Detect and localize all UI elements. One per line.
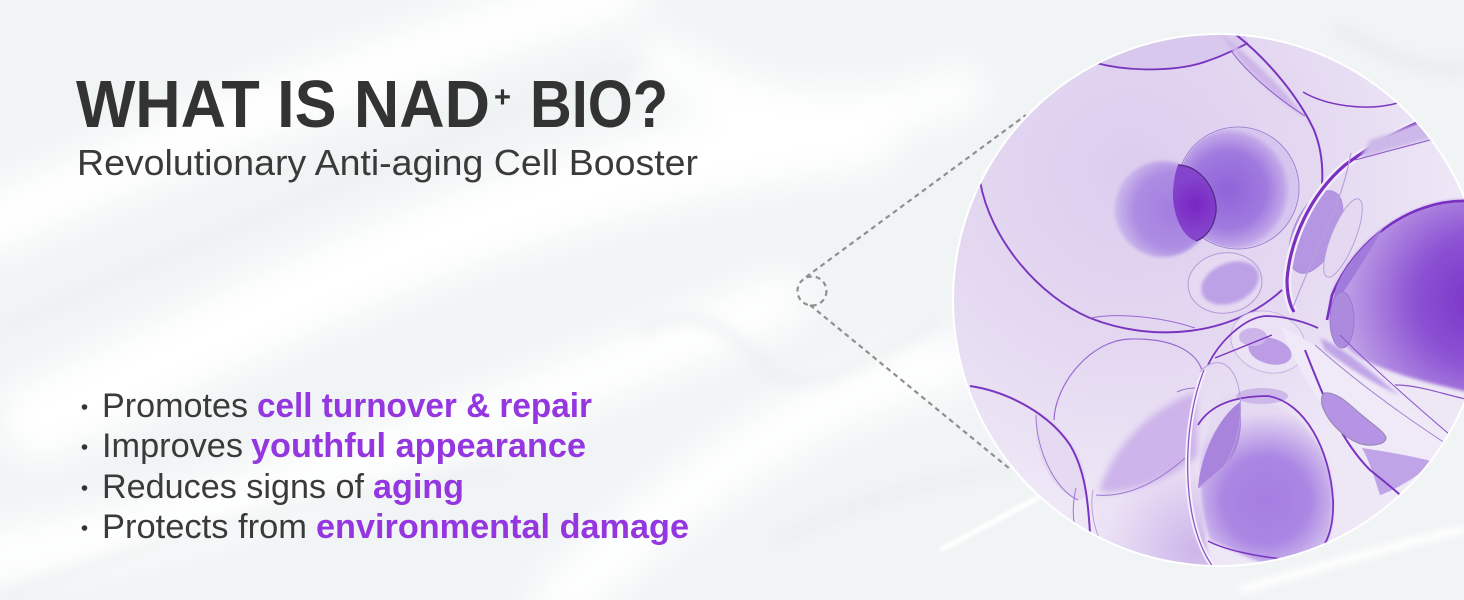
top lenses [1098, 35, 1398, 184]
bullet: cell turnover: cell turnover & repair [257, 387, 592, 425]
bullet: environmental damage: environmental damage [316, 508, 689, 546]
circle frame [952, 33, 1464, 567]
magnifier callout: dashed circle and lines [798, 115, 1026, 469]
bullet: cell turnover [82, 387, 592, 425]
large arc left [980, 181, 1282, 332]
bullet: signs of aging: aging [373, 468, 464, 506]
bullet: youthful appearance [82, 427, 586, 465]
lower oval cell [1188, 363, 1333, 568]
bullet: youthful appearance: youthful appearance [251, 427, 586, 465]
subtitle: Revolutionary Anti-aging Cell Booster [77, 142, 698, 183]
bullet: environmental damage [82, 508, 689, 546]
small cell [1188, 252, 1262, 314]
bullet: signs of aging [82, 468, 464, 506]
title: BIO? [530, 67, 668, 142]
magnified cell illustration [950, 20, 1464, 570]
bullet: signs of aging: Reduces signs of [102, 468, 365, 506]
benefits list [82, 387, 689, 546]
title: WHAT IS NAD [76, 67, 490, 142]
ring cell, right [1278, 123, 1433, 312]
center junction lenses [1207, 310, 1318, 374]
lower left arc [970, 386, 1100, 540]
big sphere, right [1327, 200, 1464, 395]
lens base [950, 30, 1464, 570]
pale round cell, lower center [1054, 339, 1210, 570]
two overlapping cells [1115, 127, 1299, 257]
bullet: environmental damage: Protects from [102, 508, 307, 546]
diagonal lens bands, lower right [1297, 334, 1464, 495]
title: + [494, 81, 511, 114]
bullet: cell turnover: Promotes [102, 387, 248, 425]
bullet: youthful appearance: Improves [102, 427, 243, 465]
